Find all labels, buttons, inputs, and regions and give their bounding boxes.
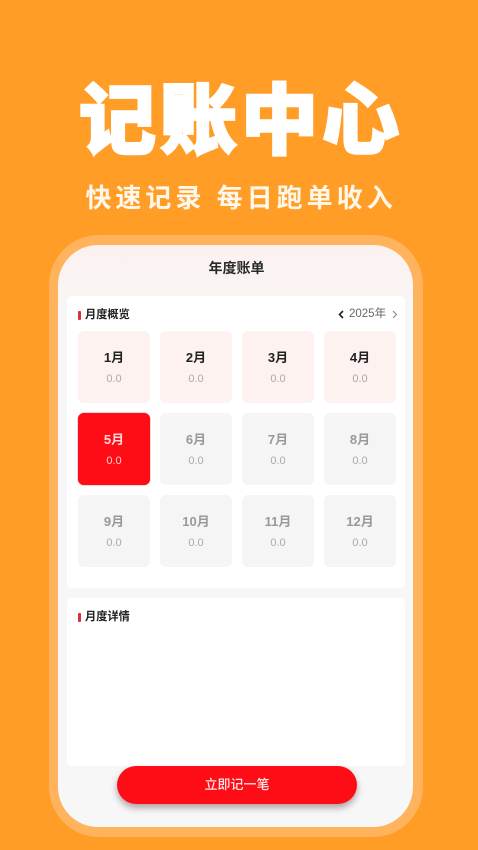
card: November: 0.0	[270, 537, 286, 549]
card: September	[78, 495, 150, 567]
card: September: 9月	[104, 514, 124, 529]
card: December: 12月	[346, 514, 374, 529]
card: July: 0.0	[270, 455, 286, 467]
card: November	[242, 495, 314, 567]
card: January: 0.0	[106, 373, 122, 385]
arrow: next year	[392, 310, 398, 318]
button: record now: 立即记一笔	[204, 777, 270, 792]
card: August: 8月	[350, 432, 370, 447]
card: May (selected): 0.0	[106, 455, 122, 467]
phone screen	[58, 245, 413, 827]
card: December: 0.0	[352, 537, 368, 549]
card: March	[242, 331, 314, 403]
card: March: 3月	[268, 350, 288, 365]
section marker	[78, 311, 81, 320]
card: December	[324, 495, 396, 567]
section heading: 月度概览	[85, 309, 130, 321]
card: July: 7月	[268, 432, 288, 447]
card: April: 0.0	[352, 373, 368, 385]
card: February	[160, 331, 232, 403]
card: February: 2月	[186, 350, 206, 365]
card: July	[242, 413, 314, 485]
screen heading: 年度账单	[208, 260, 264, 276]
card: June	[160, 413, 232, 485]
title: 记账中心	[79, 79, 403, 165]
card: November: 11月	[265, 514, 291, 529]
card: October: 10月	[182, 514, 210, 529]
card: October: 0.0	[188, 537, 204, 549]
card: October	[160, 495, 232, 567]
card: March: 0.0	[270, 373, 286, 385]
card: January	[78, 331, 150, 403]
year selector	[338, 307, 398, 320]
phone frame	[49, 235, 423, 837]
year label: 2025年	[349, 308, 386, 320]
card: May (selected)	[78, 413, 150, 485]
card: August	[324, 413, 396, 485]
card: February: 0.0	[188, 373, 204, 385]
section heading: 月度详情	[85, 611, 130, 623]
button: record now	[117, 766, 357, 804]
card: January: 1月	[104, 350, 124, 365]
card: April	[324, 331, 396, 403]
panel: monthly details	[67, 598, 405, 766]
card: June: 6月	[186, 432, 206, 447]
subtitle: 快速记录 每日跑单收入	[85, 183, 397, 213]
card: May (selected): 5月	[104, 432, 124, 447]
arrow: previous year	[338, 310, 344, 319]
section marker	[78, 613, 81, 622]
card: April: 4月	[350, 350, 370, 365]
card: August: 0.0	[352, 455, 368, 467]
panel: monthly overview	[67, 296, 405, 588]
card: September: 0.0	[106, 537, 122, 549]
card: June: 0.0	[188, 455, 204, 467]
